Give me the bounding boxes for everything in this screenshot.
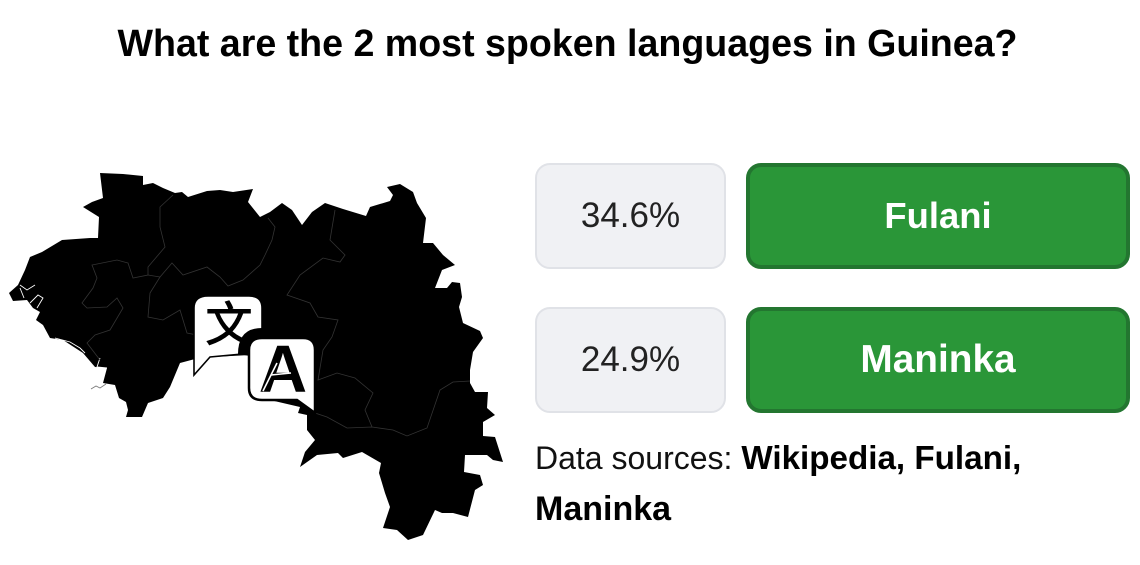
coastal islands [20, 285, 107, 368]
language button: Maninka: Maninka [860, 338, 1016, 381]
data sources [535, 440, 1021, 528]
map silhouette [9, 173, 503, 540]
percentage: Fulani: 34.6% [581, 196, 680, 235]
data sources: Data sources: Wikipedia, Fulani, [535, 440, 1021, 477]
icon: bubble with letter A: A [259, 332, 307, 407]
language button: Fulani [746, 163, 1130, 269]
percentage: Maninka: 24.9% [581, 340, 680, 379]
data sources: Maninka [535, 490, 671, 528]
language button: Maninka [746, 307, 1130, 413]
icon: translation speech bubbles [194, 286, 315, 413]
title: What are the 2 most spoken languages in Guinea? [118, 22, 1017, 64]
icon: bubble with Chinese character: 文 [206, 286, 252, 355]
region borders [82, 195, 470, 436]
language button: Fulani: Fulani [884, 195, 992, 236]
percentage: Fulani [535, 163, 726, 269]
icon: bubble outline arc [238, 328, 266, 356]
map: Guinea with translation icon [9, 173, 503, 540]
percentage: Maninka [535, 307, 726, 413]
